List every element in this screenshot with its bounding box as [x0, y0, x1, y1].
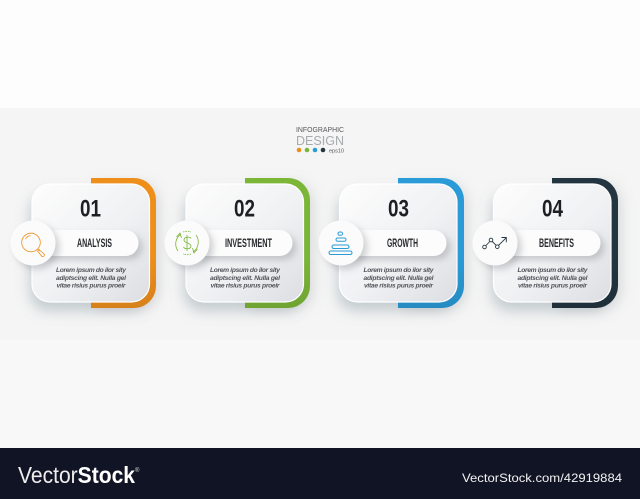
- title: infographic design: DESIGN: [296, 134, 344, 148]
- label: ANALYSIS: [77, 238, 112, 250]
- label pill: [33, 230, 138, 256]
- label: BENEFITS: [539, 238, 574, 250]
- card shadow: [494, 184, 611, 302]
- body text: vitae risius purus proeir: [364, 283, 433, 290]
- title: infographic design: eps10: [329, 148, 344, 154]
- accent bracket dark: [552, 178, 618, 308]
- icon circle: [318, 220, 364, 266]
- url: VectorStock.com/42919884: [462, 471, 622, 485]
- body text: vitae risius purus proeir: [210, 283, 280, 290]
- accent bracket green: [245, 178, 310, 308]
- icon: dollar cycle: [176, 231, 198, 255]
- number: 01: [80, 196, 101, 222]
- body text: Lorem ipsum do ilor sity: [518, 267, 588, 274]
- body text: adiptscing elit. Nulla gel: [518, 275, 588, 282]
- body text: Lorem ipsum do ilor sity: [364, 267, 434, 274]
- card: [186, 184, 304, 302]
- body text: Lorem ipsum do ilor sity: [56, 267, 126, 274]
- card shadow: [32, 184, 150, 302]
- icon circle: [164, 220, 210, 266]
- card shadow: [340, 184, 457, 302]
- label pill: [187, 230, 292, 256]
- label: GROWTH: [387, 238, 418, 250]
- label pill: [495, 230, 600, 256]
- accent shade: [245, 178, 310, 308]
- accent bracket blue: [398, 178, 464, 308]
- number: 04: [542, 196, 563, 222]
- body text: adiptscing elit. Nulla gel: [56, 275, 126, 282]
- icon: trend line: [483, 238, 506, 249]
- icon circle: [10, 220, 56, 266]
- card: [340, 184, 457, 302]
- body text: adiptscing elit. Nulla gel: [210, 275, 280, 282]
- body text: vitae risius purus proeir: [518, 283, 587, 290]
- footer bar: [0, 448, 640, 499]
- accent bracket orange: [91, 178, 156, 308]
- icon: stacked pyramid: [329, 232, 352, 254]
- card: [494, 184, 611, 302]
- panel: step 01 analysis: [10, 178, 156, 308]
- number: 03: [388, 196, 409, 222]
- body text: Lorem ipsum do ilor sity: [210, 267, 280, 274]
- logo: VectorStock: [18, 462, 135, 488]
- card shadow: [186, 184, 304, 302]
- panel: step 04 benefits: [472, 178, 618, 308]
- number: 02: [234, 196, 255, 222]
- footer bar: ®: [135, 467, 140, 474]
- label: INVESTMENT: [225, 238, 272, 250]
- body text: adiptscing elit. Nulla gel: [364, 275, 434, 282]
- title: infographic design: INFOGRAPHIC: [296, 127, 344, 134]
- accent shade: [398, 178, 464, 308]
- icon: magnifier: [22, 233, 44, 257]
- panel: step 03 growth: [318, 178, 464, 308]
- label pill: [341, 230, 446, 256]
- body text: vitae risius purus proeir: [56, 283, 126, 290]
- title: infographic design: [296, 127, 344, 154]
- panel: step 02 investment: [164, 178, 310, 308]
- accent shade: [91, 178, 156, 308]
- accent shade: [552, 178, 618, 308]
- icon circle: [472, 220, 518, 266]
- card: [32, 184, 150, 302]
